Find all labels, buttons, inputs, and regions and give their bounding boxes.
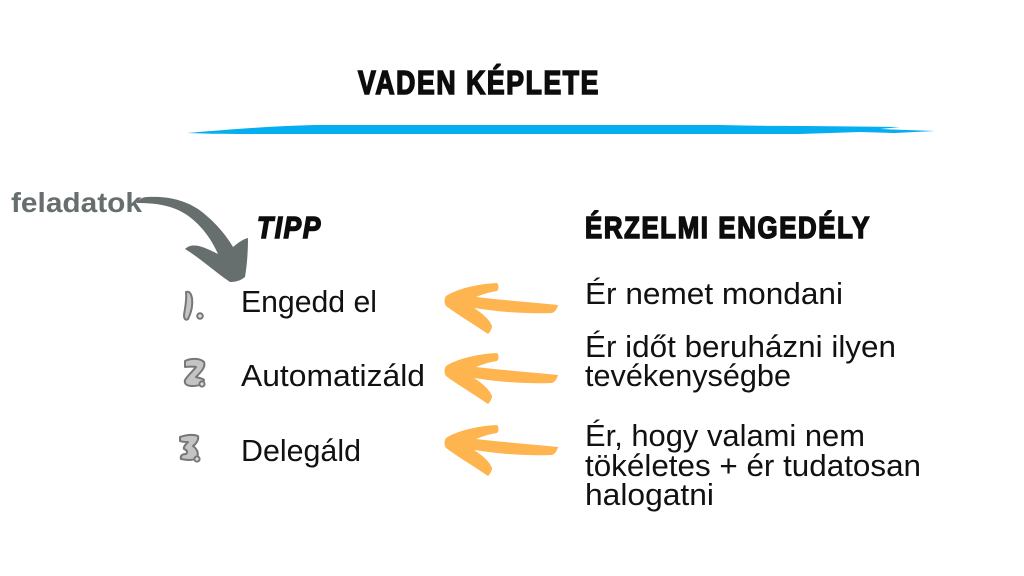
column heading: ÉRZELMI ENGEDÉLY: ÉRZELMI ENGEDÉLY: [585, 210, 871, 245]
title: VADEN KÉPLETE: [358, 64, 600, 101]
tip: Automatizáld: Automatizáld: [241, 359, 425, 393]
permission: Ér időt beruházni ilyen tevékenységbe: Ér időt beruházni ilyen: [585, 329, 896, 364]
icon: curved grey arrow: [137, 197, 248, 282]
permission: Ér, hogy valami nem tökéletes + ér tudatosan halogatni: halogatni: [585, 478, 714, 512]
icon: number 3: [180, 435, 200, 462]
row 1: [184, 276, 843, 334]
tip: Engedd el: Engedd el: [241, 285, 377, 319]
blue brush underline: [187, 125, 935, 134]
permission: Ér időt beruházni ilyen tevékenységbe: tevékenységbe: [585, 359, 791, 393]
permission: Ér, hogy valami nem tökéletes + ér tudatosan halogatni: tökéletes + ér tudatosan: [585, 449, 921, 483]
column heading: TIPP: TIPP: [257, 210, 322, 245]
arrow: orange left 2: [444, 353, 558, 404]
icon: number 2: [185, 359, 205, 387]
arrow: orange left 1: [444, 283, 558, 334]
label: feladatok: feladatok: [11, 187, 142, 218]
icon: number 1: [184, 292, 203, 320]
permission: Ér, hogy valami nem tökéletes + ér tudatosan halogatni: Ér, hogy valami nem: [585, 418, 865, 453]
row 2: [185, 329, 896, 404]
permission: Ér nemet mondani: Ér nemet mondani: [585, 276, 843, 311]
row 3: [180, 418, 921, 512]
arrow: orange left 3: [444, 425, 558, 476]
permission: Ér, hogy valami nem tökéletes + ér tudatosan halogatni: [585, 418, 921, 512]
tip: Delegáld: Delegáld: [241, 434, 361, 468]
permission: Ér időt beruházni ilyen tevékenységbe: [585, 329, 896, 393]
